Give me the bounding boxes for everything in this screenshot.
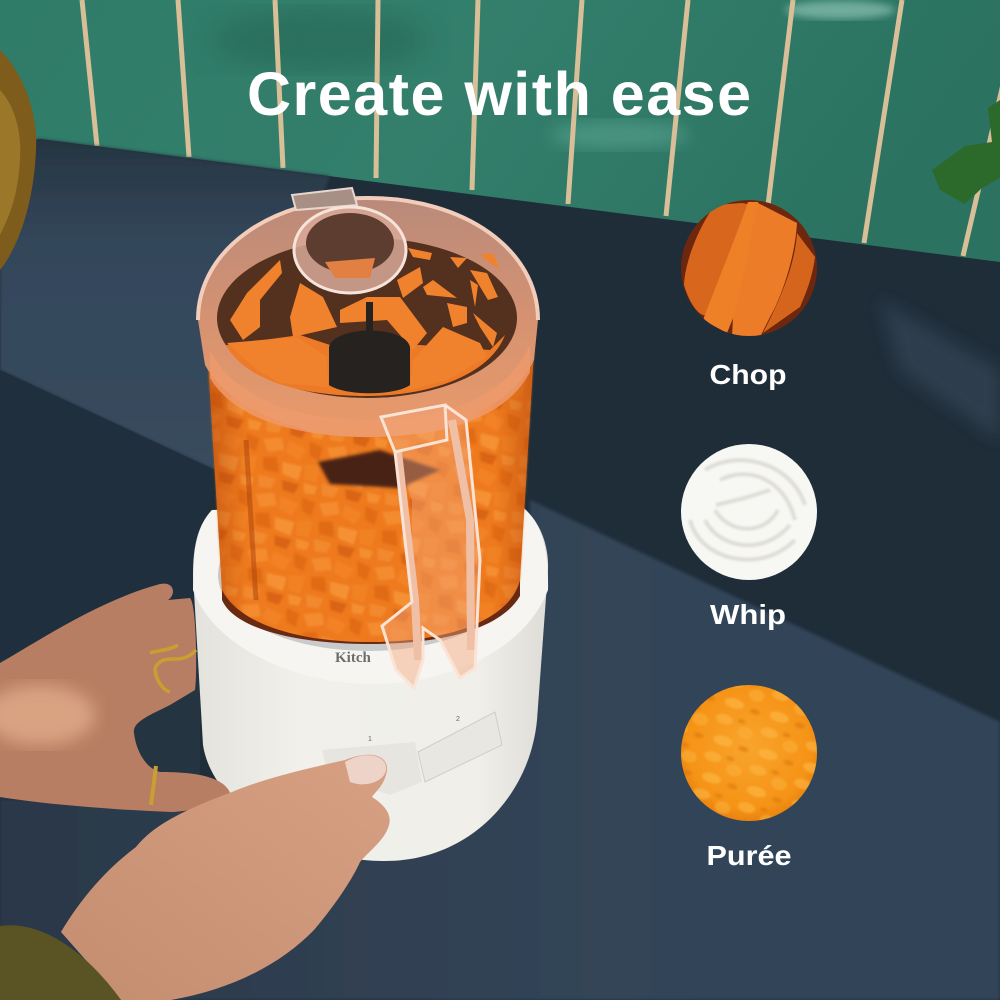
buttons: 2 [456, 716, 460, 723]
bowl with shredded carrot [208, 350, 534, 644]
label: Whip [710, 599, 786, 630]
buttons [322, 712, 502, 795]
title: Create with ease [247, 60, 751, 128]
vase at left edge [0, 50, 36, 270]
feature: chop [680, 200, 818, 390]
label: Chop [710, 359, 786, 390]
herb leaf [932, 100, 1000, 204]
food processor [193, 188, 548, 861]
handle [381, 405, 480, 688]
feature: whip [680, 444, 818, 630]
carrot puree photo [680, 685, 818, 823]
lid cap [294, 207, 406, 293]
blade hub [329, 302, 410, 393]
label: Purée [706, 840, 792, 871]
whipped cream photo [680, 444, 818, 582]
white base: Kitch [335, 650, 371, 666]
white base [193, 499, 548, 861]
background: green tile wall [0, 0, 1000, 280]
sleeve [0, 925, 121, 1000]
buttons: 1 [368, 736, 372, 743]
feature: puree [680, 685, 818, 871]
carrots photo [680, 200, 818, 338]
lid [198, 188, 538, 437]
right hand on button [61, 755, 390, 1000]
left hand [0, 584, 231, 812]
